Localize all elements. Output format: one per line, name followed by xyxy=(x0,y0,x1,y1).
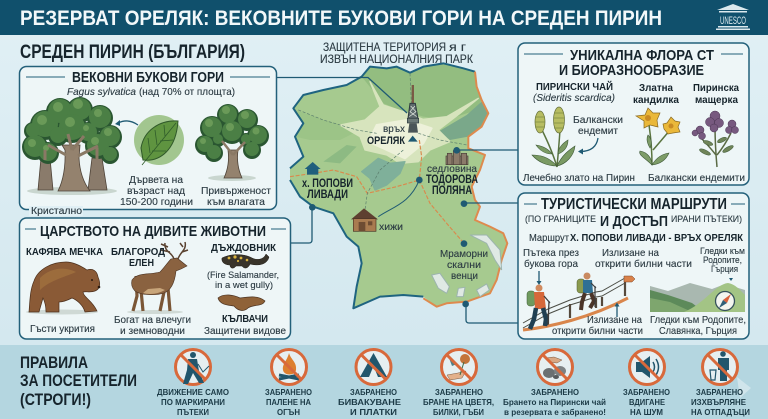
icon: UNESCO temple xyxy=(716,4,750,30)
label: Pirin tea: ПИРИНСКИ ЧАЙ xyxy=(536,80,613,93)
icon: mountain hut xyxy=(351,208,378,231)
label: newts: КЪЛВАЧИ xyxy=(222,313,268,325)
map heading xyxy=(320,42,473,66)
label: golden globeflower: кандилка xyxy=(633,94,679,106)
note: beech trail: букова гора xyxy=(524,258,578,270)
panel: tourist routes xyxy=(518,193,749,339)
panel: visitor rules xyxy=(0,345,768,419)
hiker one xyxy=(527,284,550,329)
header band xyxy=(0,0,768,35)
rule: no picking Pirin tea: Брането на Пирински чай xyxy=(503,397,606,407)
caption: views xyxy=(650,314,746,337)
rule: no fire xyxy=(265,350,312,417)
rule: no fire: ОГЪН xyxy=(277,407,300,417)
map labels: връх xyxy=(383,124,405,135)
illustration: hikers on trail xyxy=(523,272,635,330)
label: red deer: БЛАГОРОД xyxy=(111,246,165,258)
caption: climbing: Излизане на xyxy=(587,314,642,326)
rule: no picking flowers: БРАНЕ НА ЦВЕТЯ, xyxy=(423,397,494,407)
map markers xyxy=(309,147,469,307)
caption: newts: Защитени видове xyxy=(204,326,286,337)
panel heading: ВЕКОВНИ БУКОВИ ГОРИ xyxy=(72,70,224,86)
caption: deer: Богат на влечуги xyxy=(114,315,191,326)
note: beech trail: Пътека през xyxy=(523,247,579,259)
icon: home marker xyxy=(305,162,321,175)
label: salamander: ДЪЖДОВНИК xyxy=(211,242,277,254)
icon: UNESCO temple: UNESCO xyxy=(720,15,746,27)
label: red deer: ЕЛЕН xyxy=(129,257,154,269)
rule: no picking flowers: БИЛКИ, ГЪБИ xyxy=(433,407,484,417)
icon: newt xyxy=(218,295,265,310)
icon: yellow flower xyxy=(636,108,680,165)
map labels: ОРЕЛЯК xyxy=(367,135,405,147)
rule: marked trails: ДВИЖЕНИЕ САМО xyxy=(157,387,229,397)
rule: no camping: ЗАБРАНЕНО xyxy=(350,387,397,397)
caption: tree age: възраст над xyxy=(127,185,185,197)
rule: no littering: ЗАБРАНЕНО xyxy=(696,387,743,397)
caption: salamander: (Fire Salamander, xyxy=(207,270,279,281)
rule: no picking flowers: ЗАБРАНЕНО xyxy=(435,387,483,397)
icon: fire salamander xyxy=(222,254,269,268)
label: crystalline: Кристално xyxy=(31,206,82,217)
map base land xyxy=(290,63,507,308)
rule: no picking Pirin tea: ЗАБРАНЕНО xyxy=(531,387,579,397)
icon: fortress xyxy=(446,151,468,165)
rule: marked trails: ПО МАРКИРАНИ xyxy=(161,397,225,407)
icon: Pirin tea plant xyxy=(532,107,575,167)
map labels xyxy=(302,124,488,282)
rule: no picking Pirin tea: в резервата е забранено! xyxy=(504,407,606,417)
rule: no littering: НА ОТПАДЪЦИ xyxy=(691,407,750,417)
title: РЕЗЕРВАТ ОРЕЛЯК: ВЕКОВНИТЕ БУКОВИ ГОРИ НА СРЕДЕН ПИРИН xyxy=(20,7,662,30)
icon: compass xyxy=(716,292,734,310)
caption: bear: Гъсти укрития xyxy=(30,324,95,335)
arrow: to Pirin tea xyxy=(578,138,598,154)
note: climbing: Излизане на xyxy=(602,247,659,259)
panel heading xyxy=(524,47,743,79)
caption: salamander: in a wet gully) xyxy=(215,280,273,291)
map labels: венци xyxy=(451,270,478,282)
label: Pirin thyme xyxy=(693,82,739,106)
subheading: access: (ПО ГРАНИЦИТЕ xyxy=(525,214,596,225)
label: golden globeflower: Златна xyxy=(639,82,673,94)
label: Pirin thyme: мащерка xyxy=(695,94,738,106)
map heading: ЗАЩИТЕНА ТЕРИТОРИЯ xyxy=(323,42,446,54)
rule: no littering: ИЗХВЪРЛЯНЕ xyxy=(691,397,746,407)
caption: tree age xyxy=(120,174,193,208)
icon: large beech group xyxy=(22,97,122,195)
note: views: Родопите, xyxy=(703,255,742,265)
label: brown bear: КАФЯВА МЕЧКА xyxy=(26,246,103,258)
connector lines xyxy=(276,78,518,323)
subheading: access xyxy=(525,213,742,230)
map labels: седловина xyxy=(427,163,477,175)
icon: thyme xyxy=(692,111,738,167)
map border: blue side xyxy=(290,63,475,308)
caption: deer xyxy=(114,315,191,337)
map labels: Мраморни xyxy=(440,248,488,260)
panel: unique flora xyxy=(518,43,749,185)
caption: tree age: 150-200 години xyxy=(120,196,193,208)
rules heading: (СТРОГИ!) xyxy=(20,390,91,409)
subtitle: Sredna Pirin: СРЕДЕН ПИРИН (БЪЛГАРИЯ) xyxy=(20,41,245,63)
icon: red deer xyxy=(127,242,188,314)
note: Balkan endemic: Балкански xyxy=(573,115,623,126)
map labels: ТОДОРОВА xyxy=(426,174,478,186)
panel heading: ТУРИСТИЧЕСКИ МАРШРУТИ xyxy=(541,196,727,213)
rules heading xyxy=(20,353,137,409)
note: views xyxy=(700,246,745,274)
label: golden globeflower xyxy=(633,82,679,106)
caption: views: Славянка, Гърция xyxy=(659,325,737,337)
caption: moisture: Привърженост xyxy=(201,185,271,197)
route name: Маршрут xyxy=(529,232,569,244)
caption: tree age: Дървета на xyxy=(129,174,183,186)
rule: no picking flowers xyxy=(423,350,494,417)
rule: no noise: ВДИГАНЕ xyxy=(629,397,665,407)
note: climbing xyxy=(595,247,692,270)
subheading: access: ИРАНИ ПЪТЕКИ) xyxy=(671,214,742,225)
trails xyxy=(290,140,464,243)
map labels: х. ПОПОВИ xyxy=(302,178,353,190)
note: views: Гърция xyxy=(711,264,738,274)
panel heading: ЦАРСТВОТО НА ДИВИТЕ ЖИВОТНИ xyxy=(40,223,266,240)
rule: no noise xyxy=(623,350,670,417)
note: climbing: открити билни части xyxy=(595,258,692,270)
icon: tower on the peak xyxy=(407,85,419,142)
map heading: ИЗВЪН НАЦИОНАЛНИЯ ПАРК xyxy=(320,54,473,66)
latin name and share: Fagus sylvatica xyxy=(67,86,136,98)
icon: beech leaf xyxy=(134,115,184,165)
caption: deer: и земноводни xyxy=(120,326,185,337)
map labels: хижи xyxy=(379,222,403,233)
rule: no fire: ПАЛЕНЕ НА xyxy=(266,397,311,407)
icon: single beech xyxy=(195,104,269,181)
rules heading: ЗА ПОСЕТИТЕЛИ xyxy=(20,371,137,390)
hiker two xyxy=(577,272,596,310)
rule: no noise: ЗАБРАНЕНО xyxy=(623,387,670,397)
caption: climbing xyxy=(552,314,643,337)
label: Pirin tea: (Sideritis scardica) xyxy=(533,92,615,104)
rule: marked trails: ПЪТЕКИ xyxy=(177,407,209,417)
rule: no camping: И ПЛАТКИ xyxy=(350,407,397,417)
arrow: to hiker xyxy=(536,271,542,285)
rule: marked trails xyxy=(157,350,229,417)
map labels: ЛИВАДИ xyxy=(307,189,348,201)
rule: no fire: ЗАБРАНЕНО xyxy=(265,387,312,397)
rule: no noise: НА ШУМ xyxy=(630,407,663,417)
caption: medicinal gold: Лечебно злато на Пирин xyxy=(523,172,635,184)
marble rock wreaths xyxy=(432,235,502,297)
caption: views: Гледки към Родопите, xyxy=(650,314,746,326)
caption: moisture: към влагата xyxy=(207,196,265,208)
icon: brown bear xyxy=(26,262,100,314)
map labels: ПОЛЯНА xyxy=(432,185,472,197)
panel: wildlife xyxy=(20,218,290,339)
label: Pirin thyme: Пиринска xyxy=(693,82,739,94)
panel: ancient beech forests xyxy=(20,66,276,210)
route name: Х. ПОПОВИ ЛИВАДИ - ВРЪХ ОРЕЛЯК xyxy=(570,232,744,244)
note: Balkan endemic: ендемит xyxy=(578,126,618,137)
map border: orange side xyxy=(423,72,507,307)
map labels: скални xyxy=(447,259,481,271)
map heading: я г xyxy=(449,42,466,54)
panel heading: И БИОРАЗНООБРАЗИЕ xyxy=(559,62,704,79)
note: beech trail xyxy=(523,247,579,270)
rules heading: ПРАВИЛА xyxy=(20,353,88,372)
map of the reserve xyxy=(290,63,507,308)
subheading: access: И ДОСТЪП xyxy=(600,213,668,230)
note: Balkan endemic xyxy=(573,115,623,137)
label: red deer xyxy=(111,246,165,269)
arrow: leaf to tree xyxy=(115,120,138,126)
label: Pirin tea xyxy=(533,80,615,104)
latin name and share: (над 70% от площта) xyxy=(139,86,235,98)
rule: no camping: БИВАКУВАНЕ xyxy=(338,397,401,407)
rule: no camping xyxy=(338,350,401,417)
illustration: mountain view xyxy=(650,278,745,312)
panel heading: УНИКАЛНА ФЛОРА СТ xyxy=(570,47,714,64)
rule: no picking Pirin tea xyxy=(503,350,606,417)
caption: salamander xyxy=(207,270,279,291)
arrow: up to trail xyxy=(614,302,620,317)
rule: no littering xyxy=(691,350,750,417)
caption: moisture xyxy=(201,185,271,208)
caption: Balkan endemics: Балкански ендемити xyxy=(648,173,745,184)
latin name and share xyxy=(67,86,235,98)
note: views: Гледки към xyxy=(700,246,745,256)
caption: climbing: открити билни части xyxy=(552,325,643,337)
